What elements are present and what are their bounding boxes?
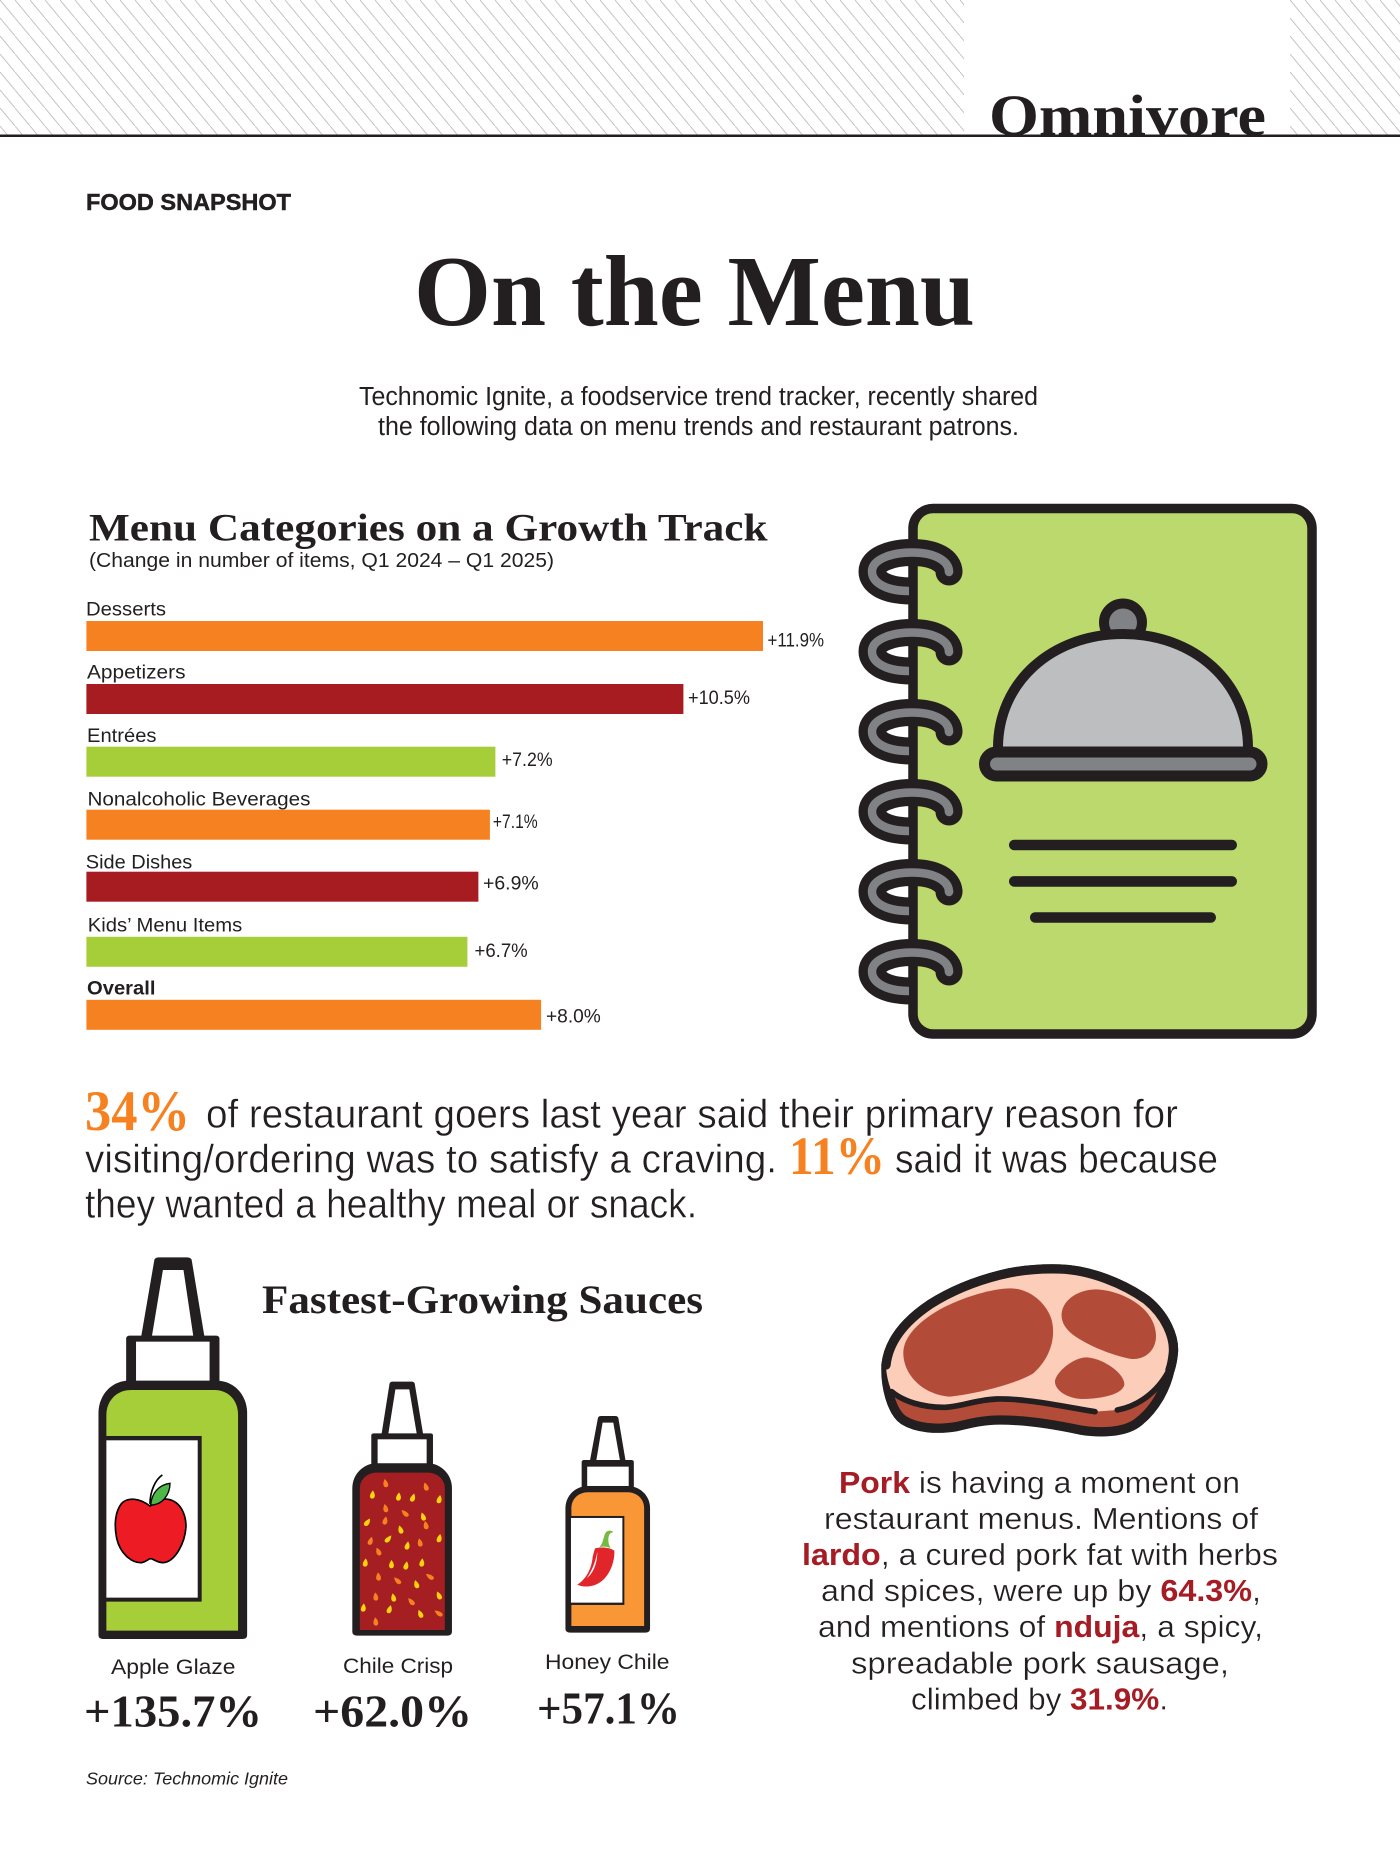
label: Chile Crisp: Chile Crisp	[343, 1654, 453, 1678]
bar: Kids' Menu Items: Kids’ Menu Items	[88, 914, 243, 936]
bar: Desserts: +11.9%	[768, 630, 824, 651]
callout: pork text: and mentions of nduja, a spicy,	[818, 1609, 1263, 1644]
intro text: the following data on menu trends and restaurant patrons.	[378, 413, 1019, 441]
callout: pork text: spreadable pork sausage,	[851, 1646, 1229, 1680]
label: Honey Chile	[537, 1650, 680, 1734]
label: Honey Chile: Honey Chile	[545, 1650, 670, 1674]
bar: Nonalcoholic Beverages	[86, 788, 538, 840]
label: Apple Glaze: Apple Glaze	[111, 1655, 236, 1679]
label: Chile Crisp	[313, 1654, 472, 1736]
bar: Side Dishes: Side Dishes	[86, 852, 193, 874]
callout: craving statistics	[85, 1080, 1218, 1226]
callout: pork text	[802, 1465, 1278, 1716]
callout: pork text: lardo, a cured pork fat with herbs	[802, 1537, 1278, 1572]
label: Apple Glaze: +135.7%	[84, 1686, 262, 1736]
icon: pork cut	[886, 1269, 1173, 1432]
callout: craving statistics: 34%	[85, 1080, 190, 1143]
bar: Side Dishes: +6.9%	[483, 874, 539, 894]
label: Apple Glaze	[84, 1655, 262, 1736]
header band with hatch pattern	[0, 0, 1400, 148]
icon: chile pepper	[577, 1531, 614, 1587]
bar: Overall: Overall	[87, 978, 156, 1000]
bar: Kids' Menu Items	[86, 914, 528, 967]
publication logo: Omnivore: Omnivore	[989, 83, 1266, 148]
bar: Appetizers: +10.5%	[688, 688, 750, 709]
title: On the Menu	[414, 235, 975, 347]
bar: Kids' Menu Items: +6.7%	[474, 941, 528, 962]
chile flakes	[367, 1479, 444, 1626]
icon: Apple Glaze bottle	[98, 1257, 247, 1639]
bar: Overall	[86, 978, 601, 1030]
bar: Desserts	[86, 599, 824, 651]
section label: FOOD SNAPSHOT	[86, 189, 292, 215]
bar: Side Dishes	[86, 852, 539, 902]
menu text lines	[1009, 840, 1237, 923]
callout: pork text: climbed by 31.9%.	[911, 1682, 1168, 1716]
label: Honey Chile: +57.1%	[537, 1684, 680, 1734]
icon: Chile Crisp bottle	[352, 1382, 452, 1636]
bar: Appetizers	[86, 661, 750, 714]
callout: craving statistics: of restaurant goers last year said their primary reason for	[206, 1092, 1178, 1136]
callout: craving statistics: 11%	[789, 1126, 885, 1186]
icon: cloche	[984, 604, 1262, 776]
callout: pork text: restaurant menus. Mentions of	[824, 1501, 1258, 1536]
callout: craving statistics: said it was because	[895, 1138, 1218, 1182]
chart heading: (Change in number of items, Q1 2024 – Q1 2025)	[89, 549, 554, 572]
callout: craving statistics: visiting/ordering was to satisfy a craving.	[85, 1138, 777, 1182]
bar: Entrées: +7.2%	[502, 750, 553, 771]
callout: pork text: Pork is having a moment on	[839, 1465, 1240, 1500]
icon: spiral notebook with cloche	[872, 508, 1312, 1034]
icon: Honey Chile bottle	[565, 1416, 650, 1633]
icon: apple	[115, 1475, 186, 1563]
sauces heading: Fastest-Growing Sauces	[262, 1277, 703, 1322]
bar: Desserts: Desserts	[86, 599, 166, 621]
intro text: Technomic Ignite, a foodservice trend tracker, recently shared	[359, 383, 1038, 411]
bar: Nonalcoholic Beverages: Nonalcoholic Beverages	[88, 788, 311, 810]
label: Chile Crisp: +62.0%	[313, 1686, 472, 1736]
source note: Source: Technomic Ignite	[86, 1768, 288, 1788]
callout: pork text: and spices, were up by 64.3%,	[821, 1573, 1261, 1608]
bar: Appetizers: Appetizers	[87, 661, 186, 683]
bar: Nonalcoholic Beverages: +7.1%	[493, 812, 538, 833]
bar chart: menu categories	[86, 599, 824, 1030]
bar: Overall: +8.0%	[546, 1007, 601, 1028]
bar: Entrées	[86, 725, 553, 777]
intro text	[359, 383, 1038, 441]
callout: craving statistics: they wanted a healthy meal or snack.	[85, 1182, 697, 1226]
chart heading	[89, 506, 768, 572]
bar: Entrées: Entrées	[87, 725, 157, 747]
chart heading: Menu Categories on a Growth Track	[89, 506, 768, 550]
